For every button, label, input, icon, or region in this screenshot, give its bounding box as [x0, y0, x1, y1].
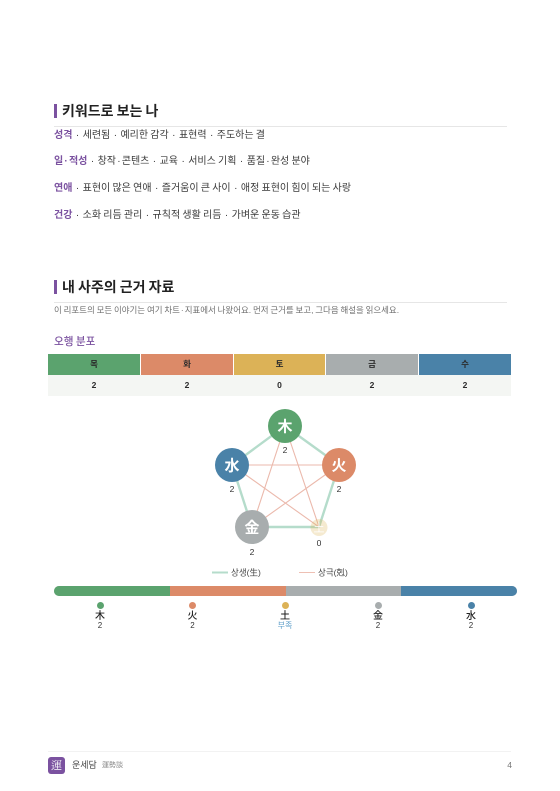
node counts: 0 [317, 538, 322, 548]
keyword: personality: 성격 세련됨 예리한 감각 표현력 주도하는 결 [54, 130, 265, 140]
header: earth: 토 [276, 359, 283, 369]
node: earth: 土 [314, 522, 324, 534]
node counts [230, 445, 342, 557]
bar label: fire [188, 602, 198, 630]
segment: wood [54, 586, 170, 596]
heading accent bar [54, 104, 57, 118]
value: water: 2 [463, 380, 467, 390]
value row background [48, 375, 511, 396]
page number: 4 [507, 760, 512, 770]
footer brand: 운세담 [72, 760, 97, 770]
bar label: metal [373, 602, 383, 630]
footer brand hanja: 運勢談 [102, 762, 123, 769]
intro text: 이 리포트의 모든 이야기는 여기 차트 지표에서 나왔어요. 먼저 근거를 보고, 그다음 해설을 읽으세요. [54, 304, 399, 314]
legend: controlling cycle: 상극(剋) [318, 568, 348, 578]
panel: keywords [54, 103, 351, 220]
node: earth [310, 519, 328, 536]
keyword: work aptitude: · [64, 156, 68, 167]
bar label: earth [278, 602, 292, 630]
bar label: water: 水 [466, 610, 476, 622]
node: water: 水 [224, 458, 240, 474]
stacked distribution bar [54, 586, 517, 596]
bar label: fire: 2 [190, 621, 195, 630]
intro text: · [181, 304, 184, 314]
node: fire: 火 [331, 458, 347, 474]
header: wood [48, 354, 140, 375]
segment: metal [286, 586, 401, 596]
node: fire [322, 448, 356, 482]
value: wood: 2 [92, 380, 96, 390]
keyword: work aptitude: · [153, 156, 156, 167]
keyword: personality: · [114, 130, 117, 140]
node: wood [268, 409, 302, 443]
heading: keywords: 키워드로 보는 나 [62, 103, 158, 119]
keyword: romance: · [155, 183, 158, 194]
table: five elements [48, 354, 511, 396]
subheading: five elements distribution: 오행 분포 [54, 336, 95, 348]
header: water: 수 [461, 359, 469, 369]
segment: fire [170, 586, 286, 596]
bar label: metal: 金 [373, 610, 383, 622]
node counts: 2 [337, 484, 342, 494]
legend: controlling cycle [299, 568, 348, 578]
keyword: health: · [76, 210, 79, 220]
node: wood: 木 [277, 418, 293, 436]
keyword: work aptitude: · [117, 156, 121, 167]
header: fire: 화 [183, 359, 191, 369]
node: metal [235, 510, 269, 544]
bar label: water [466, 602, 476, 630]
bar label: fire: 火 [188, 610, 198, 622]
heading accent bar: evidence [54, 280, 57, 294]
keyword: personality: · [210, 130, 213, 140]
heading: evidence: 내 사주의 근거 자료 [62, 279, 174, 295]
legend: generating cycle [212, 568, 261, 578]
header: wood: 목 [90, 359, 98, 369]
value: metal: 2 [370, 380, 374, 390]
value: earth: 0 [277, 380, 282, 390]
pentagon chart: five elements cycle [212, 409, 356, 578]
node: water [215, 448, 249, 482]
bar label: earth: 부족 [278, 621, 292, 630]
keyword: work aptitude: 일 적성 창작 콘텐츠 교육 서비스 기획 품질 완성 분야 [54, 156, 310, 167]
keyword: work aptitude: · [91, 156, 94, 167]
node counts: 2 [230, 484, 235, 494]
header: water [419, 354, 511, 375]
keyword: romance: 연애 표현이 많은 연애 즐거움이 큰 사이 애정 표현이 힘이 되는 사랑 [54, 183, 351, 194]
keyword: romance: · [234, 183, 237, 194]
keyword: health: · [225, 210, 228, 220]
keyword: romance: · [76, 183, 79, 194]
value: fire: 2 [185, 380, 189, 390]
keyword: personality: · [172, 130, 176, 140]
bar label: wood: 2 [98, 621, 102, 630]
footer logo [48, 757, 65, 774]
legend: generating cycle: 상생(生) [231, 568, 261, 578]
keyword: work aptitude: · [181, 156, 185, 167]
segment: water [401, 586, 517, 596]
node: metal: 金 [244, 518, 260, 536]
node counts: 2 [283, 445, 288, 455]
bar label: earth: 土 [280, 610, 290, 622]
keyword: health: · [146, 210, 149, 220]
keyword: health: 건강 소화 리듬 관리 규칙적 생활 리듬 가벼운 운동 습관 [54, 210, 301, 220]
bar label: metal: 2 [376, 621, 380, 630]
node counts: 2 [250, 547, 255, 557]
header: earth [234, 354, 325, 375]
bar label: water: 2 [469, 621, 473, 630]
keyword: work aptitude: · [240, 156, 243, 167]
header: metal [326, 354, 418, 375]
keyword: personality: · [76, 130, 79, 140]
header: fire [141, 354, 233, 375]
bar label: wood: 木 [95, 610, 105, 622]
keyword: work aptitude: · [266, 156, 270, 167]
footer logo: 運 [51, 757, 62, 773]
header: metal: 금 [368, 359, 376, 369]
bar label: wood [95, 602, 105, 630]
